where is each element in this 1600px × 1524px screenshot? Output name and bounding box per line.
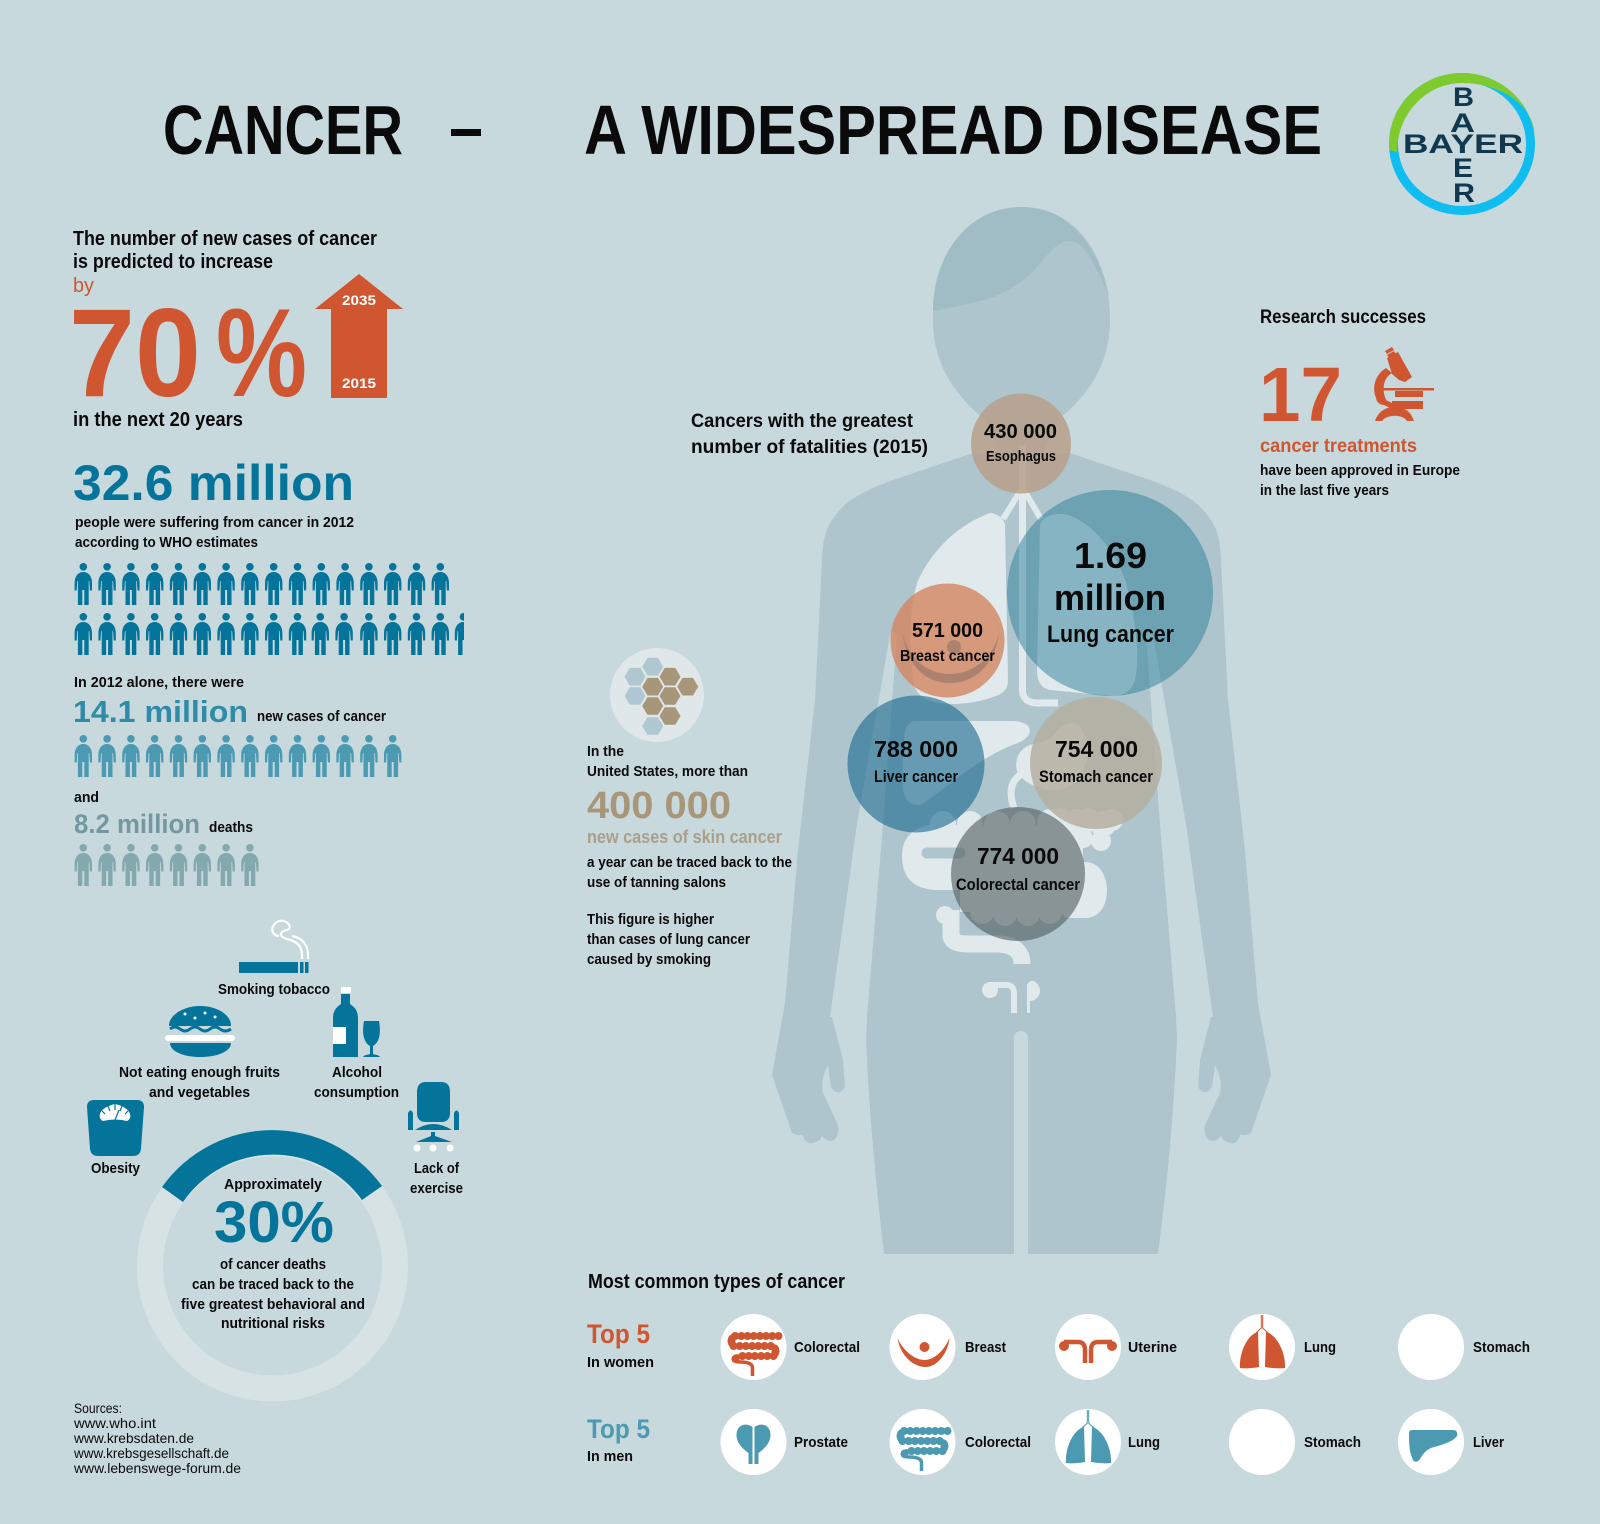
panel: research successes xyxy=(1259,307,1460,499)
bubble: liver cancer xyxy=(848,696,984,832)
body silhouette xyxy=(772,200,1271,1274)
panel: 14.1 million new cases xyxy=(73,674,401,777)
label: diet xyxy=(119,1064,280,1101)
description: in the last five years xyxy=(1260,482,1389,499)
panel: skin cancer xyxy=(587,648,792,968)
icon: microscope xyxy=(1374,347,1434,421)
label: Stomach xyxy=(1304,1434,1361,1451)
icon: breast xyxy=(890,1314,956,1380)
donut text: 30% xyxy=(214,1190,334,1255)
label: smoking: Smoking tobacco xyxy=(218,981,330,998)
description: caused by smoking xyxy=(587,951,711,968)
donut chart: 30% xyxy=(150,1130,395,1388)
right lung xyxy=(1037,514,1137,696)
label: exercise xyxy=(410,1160,463,1197)
people row xyxy=(75,735,401,777)
row label: men: In men xyxy=(587,1448,633,1465)
icon: colorectal women xyxy=(720,1314,786,1380)
row label: women: Top 5 xyxy=(587,1319,650,1349)
icon: lung men xyxy=(1055,1409,1121,1475)
label: alcohol xyxy=(314,1064,399,1101)
row label: women xyxy=(587,1319,654,1371)
label: Colorectal xyxy=(794,1339,860,1356)
row label: men xyxy=(587,1414,650,1465)
icon: stomach men xyxy=(1229,1409,1295,1475)
hair xyxy=(933,207,1109,311)
big number: 32.6 million xyxy=(73,455,354,511)
icon: prostate xyxy=(720,1409,786,1475)
donut text: nutritional risks xyxy=(221,1315,325,1332)
intro text: by xyxy=(73,275,94,297)
number: 400 000 xyxy=(587,785,731,827)
donut text: five greatest behavioral and xyxy=(181,1296,365,1313)
bubble: breast cancer: Breast cancer xyxy=(900,648,995,665)
big number 70%: % xyxy=(216,284,307,423)
caption: new cases of cancer xyxy=(257,708,386,725)
bubble: stomach cancer: Stomach cancer xyxy=(1039,767,1153,786)
icon: colorectal men xyxy=(890,1409,956,1475)
sources: www.who.int xyxy=(73,1415,156,1431)
heading: Most common types of cancer xyxy=(588,1271,845,1293)
people row xyxy=(75,844,259,886)
donut text: Approximately xyxy=(224,1176,323,1193)
organs xyxy=(902,445,1137,1013)
icon: office chair xyxy=(408,1082,459,1152)
arrow 2015 to 2035: 2015 xyxy=(342,375,376,391)
subhead: cancer treatments xyxy=(1260,436,1417,457)
bubble: colorectal cancer: Colorectal cancer xyxy=(956,875,1080,894)
logo: Bayer cross: E xyxy=(1453,153,1473,183)
stomach xyxy=(1016,723,1088,790)
sources: Sources: xyxy=(74,1400,122,1416)
panel: behavioral risks xyxy=(87,921,463,1388)
panel: 32.6 million xyxy=(73,455,472,655)
title xyxy=(163,91,1322,169)
icon: stomach women xyxy=(1398,1314,1464,1380)
heading: fatalities: number of fatalities (2015) xyxy=(691,437,928,458)
row label: women: In women xyxy=(587,1354,654,1371)
icon: bottle and glass xyxy=(333,987,380,1057)
description: have been approved in Europe xyxy=(1260,462,1460,479)
description: a year can be traced back to the xyxy=(587,854,792,871)
donut text: of cancer deaths xyxy=(220,1256,326,1273)
heading: fatalities: Cancers with the greatest xyxy=(691,411,914,432)
logo: Bayer cross: B xyxy=(1453,82,1474,112)
icon: liver xyxy=(1398,1409,1464,1475)
lead-in: In the xyxy=(587,743,624,760)
heading: fatalities xyxy=(691,411,928,458)
title: CANCER xyxy=(163,91,403,169)
heading: Research successes xyxy=(1260,307,1426,328)
big number 70% xyxy=(69,284,307,423)
label: alcohol: consumption xyxy=(314,1084,399,1101)
panel: 70% forecast xyxy=(69,228,403,431)
lead-in xyxy=(587,743,748,780)
description: people were suffering from cancer in 2012 xyxy=(75,514,354,531)
bubble: colorectal cancer xyxy=(951,807,1085,941)
label: diet: and vegetables xyxy=(149,1084,250,1101)
arrow 2015 to 2035 xyxy=(315,274,403,398)
row label: men: Top 5 xyxy=(587,1414,650,1444)
bubble: esophagus: 430 000 xyxy=(984,421,1057,443)
description: according to WHO estimates xyxy=(75,534,258,551)
bubble: breast cancer: 571 000 xyxy=(912,620,983,642)
bubble: colorectal cancer: 774 000 xyxy=(977,843,1059,869)
intro text xyxy=(73,228,377,297)
sources: www.lebenswege-forum.de xyxy=(73,1460,241,1476)
intestines xyxy=(902,808,1123,926)
label: Liver xyxy=(1473,1434,1504,1451)
rectum xyxy=(951,910,1022,964)
label: Breast xyxy=(965,1339,1006,1356)
big number 70%: 70 xyxy=(69,284,201,423)
lead-in: United States, more than xyxy=(587,763,748,780)
people row 2 xyxy=(75,613,472,655)
logo: Bayer cross xyxy=(1389,73,1534,210)
bubble: lung cancer xyxy=(1007,490,1213,696)
label: exercise: exercise xyxy=(410,1180,463,1197)
bubble: esophagus: Esophagus xyxy=(986,448,1056,465)
label: Lung xyxy=(1304,1339,1336,1356)
liver xyxy=(903,721,1030,805)
bronchi xyxy=(1003,490,1041,519)
bubble: breast cancer xyxy=(890,584,1004,698)
description xyxy=(1260,462,1460,499)
bladder and ureters xyxy=(988,985,1014,1013)
bubble: lung cancer: Lung cancer xyxy=(1047,621,1174,648)
bubble: liver cancer: 788 000 xyxy=(874,736,958,762)
intro text: The number of new cases of cancer xyxy=(73,228,377,250)
number: 14.1 million xyxy=(73,694,248,729)
panel: 8.2 million deaths xyxy=(74,789,259,886)
intro text: is predicted to increase xyxy=(73,251,273,273)
label: obesity: Obesity xyxy=(91,1160,141,1177)
icon: scale xyxy=(87,1100,144,1156)
bubble: stomach cancer xyxy=(1030,697,1162,829)
title: A WIDESPREAD DISEASE xyxy=(584,91,1322,169)
lead-in: and xyxy=(74,789,99,806)
logo: Bayer cross: R xyxy=(1453,178,1475,208)
bubble: esophagus xyxy=(971,394,1071,494)
people row 1 xyxy=(75,563,449,605)
description: use of tanning salons xyxy=(587,874,726,891)
label: Lung xyxy=(1128,1434,1160,1451)
label: Stomach xyxy=(1473,1339,1530,1356)
bubble: lung cancer: 1.69 xyxy=(1074,535,1147,576)
description: This figure is higher xyxy=(587,911,714,928)
duodenum xyxy=(1011,775,1020,808)
label: Uterine xyxy=(1128,1339,1177,1356)
icon: burger xyxy=(165,1006,235,1057)
icon: uterine xyxy=(1055,1314,1121,1380)
label: Prostate xyxy=(794,1434,848,1451)
icon: skin cells xyxy=(610,648,704,742)
bubble: liver cancer: Liver cancer xyxy=(874,767,958,786)
logo: Bayer cross: A xyxy=(1450,108,1475,138)
description: than cases of lung cancer xyxy=(587,931,750,948)
label: Colorectal xyxy=(965,1434,1031,1451)
trachea and esophagus xyxy=(1022,445,1058,703)
donut text xyxy=(181,1176,365,1332)
label: exercise: Lack of xyxy=(414,1160,460,1177)
sources xyxy=(73,1400,241,1476)
label: alcohol: Alcohol xyxy=(332,1064,382,1081)
number: 8.2 million xyxy=(74,809,200,839)
donut text: can be traced back to the xyxy=(192,1276,354,1293)
lead-in: In 2012 alone, there were xyxy=(74,674,244,691)
bubble: lung cancer: million xyxy=(1054,577,1166,618)
caption: in the next 20 years xyxy=(73,409,243,431)
logo: Bayer cross: BAYER xyxy=(1403,129,1523,159)
icon: lung women xyxy=(1229,1314,1295,1380)
caption: deaths xyxy=(209,819,253,836)
sources: www.krebsgesellschaft.de xyxy=(73,1445,229,1461)
panel: most common types xyxy=(587,1271,1530,1475)
description xyxy=(587,854,792,968)
description xyxy=(75,514,354,551)
sources: www.krebsdaten.de xyxy=(73,1430,194,1446)
icon: cigarette xyxy=(239,921,308,973)
arrow 2015 to 2035: 2035 xyxy=(342,292,376,308)
number 17: 17 xyxy=(1259,352,1342,438)
left lung xyxy=(910,513,1008,704)
label: diet: Not eating enough fruits xyxy=(119,1064,280,1081)
bubble: stomach cancer: 754 000 xyxy=(1055,736,1138,762)
subhead: new cases of skin cancer xyxy=(587,827,782,847)
